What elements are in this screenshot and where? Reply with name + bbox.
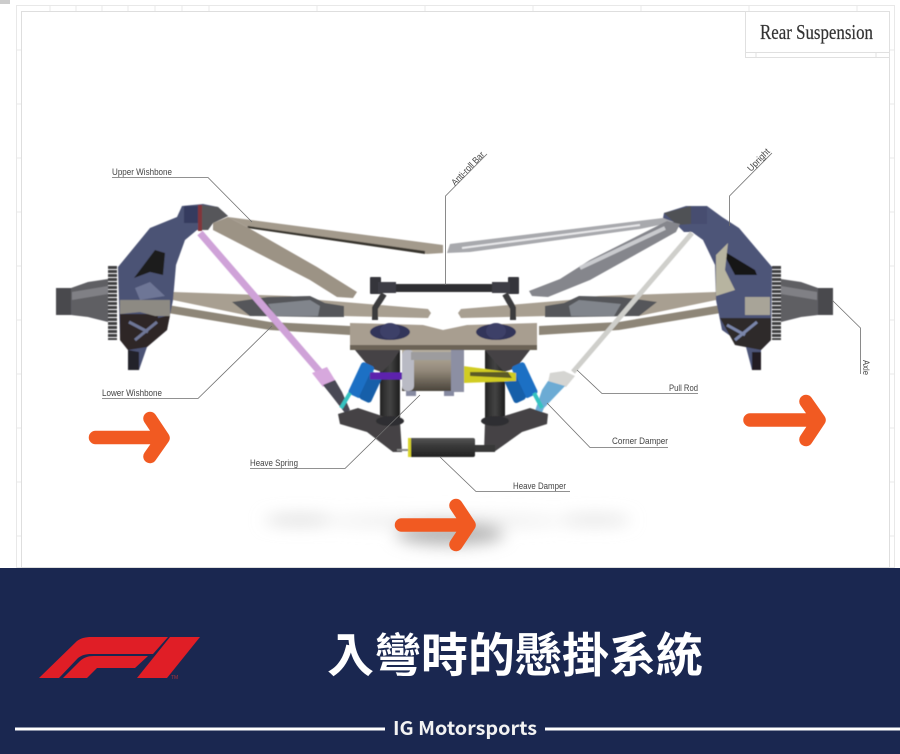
right pull rod	[520, 233, 692, 428]
left axle	[56, 266, 112, 340]
label: Axle: Axle	[861, 360, 871, 375]
footer credit: IG Motorsports	[393, 714, 537, 741]
right upper wishbone	[447, 218, 680, 297]
label: Anti-roll Bar: Anti-roll Bar	[449, 150, 486, 187]
right axle	[776, 266, 833, 340]
F1 logo	[39, 637, 200, 681]
label: Upper Wishbone	[112, 167, 252, 222]
central actuator	[402, 350, 464, 396]
label: Lower Wishbone: Lower Wishbone	[102, 388, 162, 398]
yellow link	[463, 366, 516, 383]
footer divider left	[15, 728, 385, 730]
rockers	[338, 350, 548, 452]
label: Heave Spring: Heave Spring	[250, 458, 298, 468]
plate knobs	[370, 323, 516, 340]
left corner damper	[341, 361, 385, 408]
suspension assembly	[56, 204, 833, 457]
label: Pull Rod: Pull Rod	[669, 383, 698, 393]
label: Axle	[832, 300, 871, 375]
arrow: left	[96, 418, 163, 456]
purple rod	[370, 372, 402, 380]
title block heading: Rear Suspension	[760, 20, 873, 44]
drawing sheet frame	[0, 0, 895, 568]
heave spring columns	[380, 348, 505, 422]
right upright	[663, 206, 772, 370]
main title: 入彎時的懸掛系統	[327, 629, 703, 682]
label: Heave Damper	[440, 457, 570, 492]
label: Corner Damper	[547, 403, 668, 448]
arrow: bottom	[402, 506, 469, 544]
right lower wishbone	[458, 292, 739, 335]
label: Corner Damper: Corner Damper	[612, 436, 668, 446]
F1 logo: TM	[171, 675, 178, 681]
anti-roll bar	[370, 277, 519, 320]
arrow: right	[750, 402, 819, 440]
footer divider right	[545, 728, 900, 730]
label: Pull Rod	[577, 370, 698, 394]
label: Upright: Upright	[745, 146, 772, 173]
label: Upper Wishbone: Upper Wishbone	[112, 167, 172, 177]
central plate	[350, 323, 537, 350]
label: Heave Spring	[250, 395, 420, 468]
left upper wishbone	[213, 217, 443, 298]
label: Upright	[730, 146, 772, 226]
title block	[745, 12, 890, 58]
label: Anti-roll Bar	[446, 150, 487, 285]
ground shadow	[264, 515, 631, 545]
heave damper	[397, 438, 495, 457]
left lower wishbone	[150, 292, 431, 335]
left pull rod	[200, 233, 350, 413]
label: Lower Wishbone	[102, 326, 272, 398]
label: Heave Damper: Heave Damper	[513, 481, 566, 491]
right corner damper	[500, 361, 542, 408]
left upright	[118, 204, 228, 370]
bottom banner	[0, 568, 900, 754]
